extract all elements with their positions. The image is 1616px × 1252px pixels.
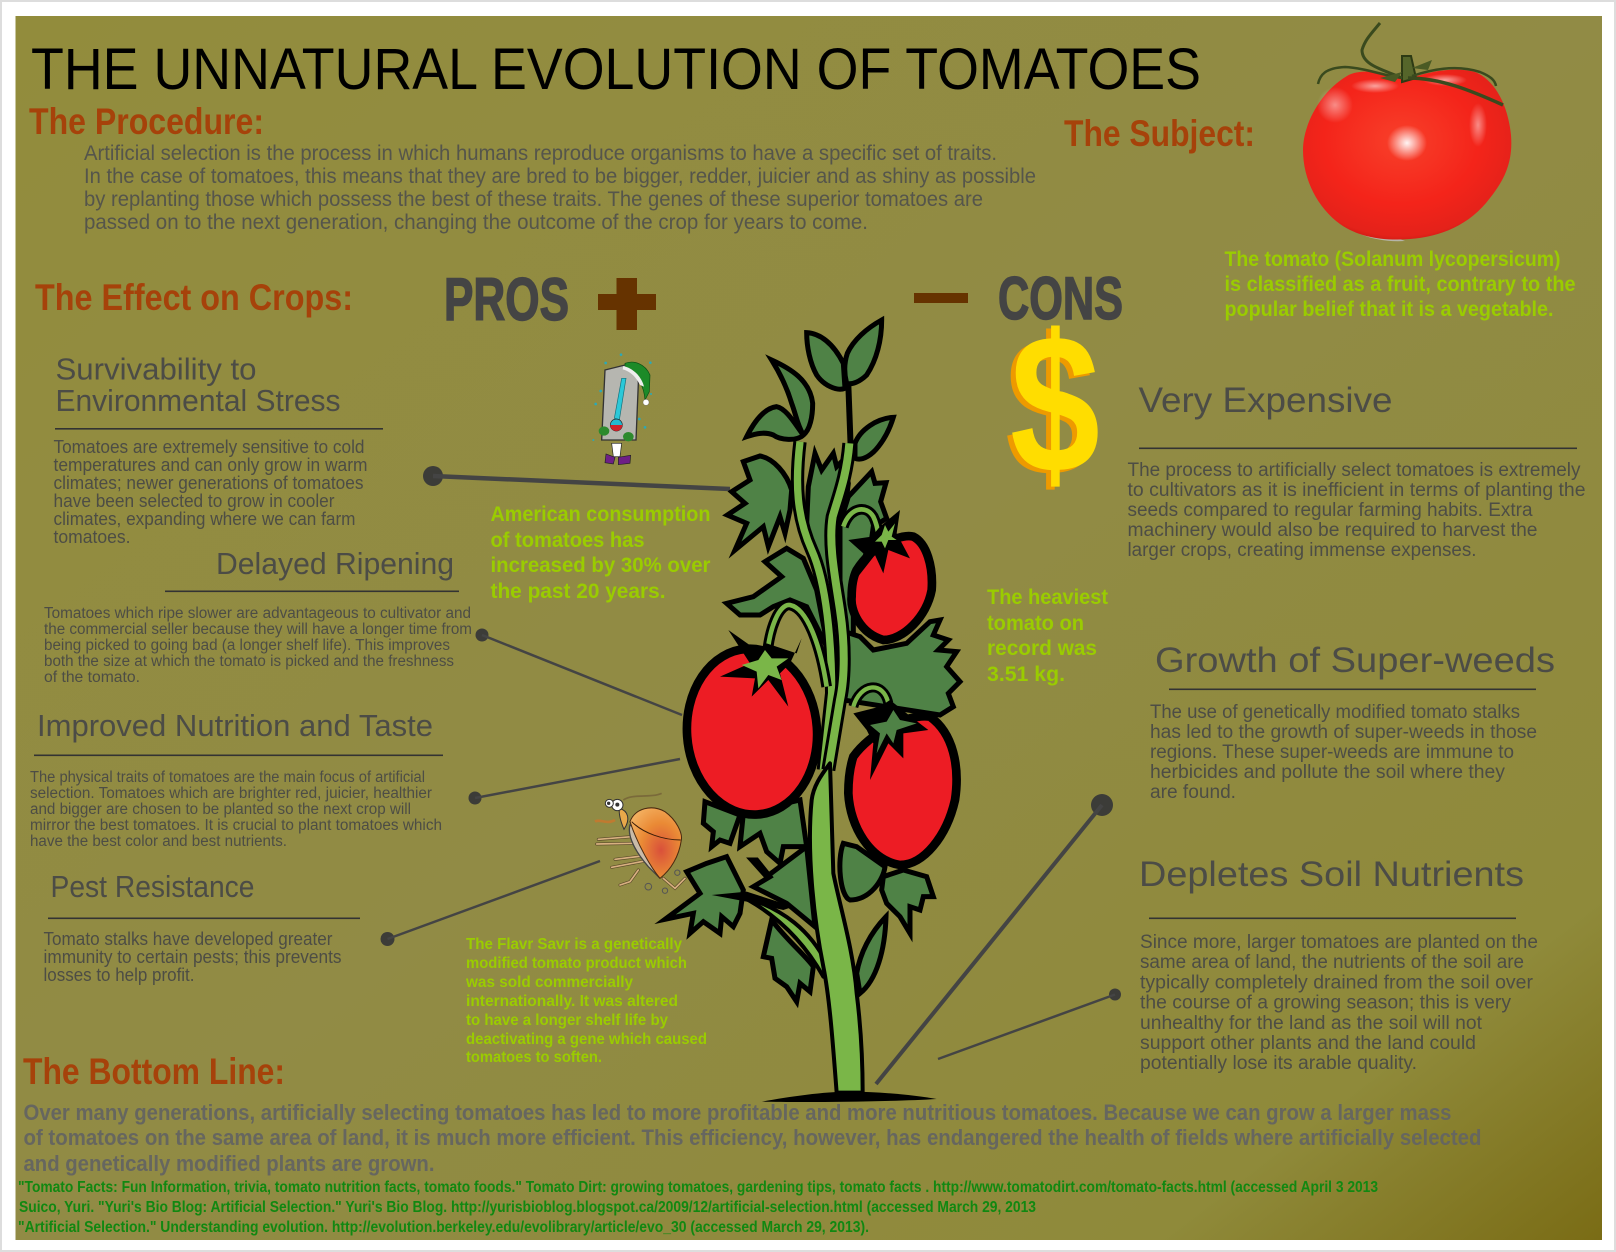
icon: dollar sign: $ <box>1010 295 1100 515</box>
fact: tomato is a fruit: is classified as a fruit, contrary to the <box>1224 273 1576 296</box>
heading: survivability: Survivability to <box>56 352 256 386</box>
references: "Artificial Selection." Understanding evolution. http://evolution.berkeley.edu/evolibrary/article/evo_30 (accessed March 29, 2013). <box>18 1219 869 1236</box>
fact: flavr savr: to have a longer shelf life by <box>466 1012 668 1029</box>
illustration: tomato plant <box>665 320 960 1102</box>
text: soil nutrients body: typically completely drained from the soil over <box>1140 972 1534 994</box>
text: super-weeds body <box>1150 702 1537 803</box>
text: pest resistance body: immunity to certain pests; this prevents <box>44 947 342 967</box>
heading: the effect on crops: The Effect on Crops: <box>35 277 353 318</box>
fact: flavr savr: internationally. It was altered <box>466 993 678 1010</box>
text: survivability body: climates, expanding where we can farm <box>54 509 356 529</box>
fact: flavr savr: was sold commercially <box>465 974 633 991</box>
icon: dollar sign: $ <box>1005 298 1095 518</box>
fact: tomato is a fruit <box>1224 248 1576 321</box>
fact: flavr savr: The Flavr Savr is a genetically <box>466 936 682 953</box>
icon: shivering thermometer <box>592 353 652 465</box>
fact: american consumption: increased by 30% over <box>490 554 710 577</box>
text: soil nutrients body: the course of a growing season; this is very <box>1140 992 1511 1014</box>
leader: delayed ripening <box>476 628 682 715</box>
pro: pest resistance <box>44 869 360 985</box>
text: procedure description <box>84 142 1036 234</box>
text: survivability body: temperatures and can only grow in warm <box>54 455 368 475</box>
heading: pros: PROS <box>444 266 569 333</box>
fact: heaviest tomato: tomato on <box>987 612 1084 635</box>
fact: heaviest tomato: record was <box>987 637 1097 660</box>
references: Suico, Yuri. "Yuri's Bio Blog: Artificial Selection." Yuri's Bio Blog. http://yurisbioblog.blogspot.ca/2009/12/artificial-selection.html (accessed March 29, 2013 <box>19 1199 1036 1216</box>
fact: tomato is a fruit: popular belief that it is a vegetable. <box>1224 298 1554 321</box>
leader: pest resistance <box>380 861 600 946</box>
heading: the bottom line: The Bottom Line: <box>23 1051 285 1092</box>
heading: survivability: Environmental Stress <box>56 383 340 418</box>
heading: delayed ripening: Delayed Ripening <box>216 546 454 581</box>
pro: improved nutrition and taste <box>30 708 443 850</box>
panel: the procedure <box>29 101 1036 234</box>
text: bottom line summary <box>24 1100 1482 1176</box>
text: very expensive body: machinery would also be required to harvest the <box>1128 520 1538 541</box>
text: pest resistance body <box>44 929 342 985</box>
leader: improved nutrition <box>468 759 680 804</box>
text: improved nutrition body: selection. Tomatoes which are brighter red, juicier, healthier <box>30 785 432 802</box>
text: delayed ripening body: being picked to going bad (a longer shelf life). This improves <box>44 637 450 654</box>
text: delayed ripening body: of the tomato. <box>44 669 140 686</box>
text: very expensive body <box>1128 460 1586 561</box>
text: survivability body: Tomatoes are extremely sensitive to cold <box>54 437 364 457</box>
tomato fruits <box>681 510 957 1102</box>
text: super-weeds body: The use of genetically modified tomato stalks <box>1150 702 1520 723</box>
text: very expensive body: The process to artificially select tomatoes is extremely <box>1128 460 1581 481</box>
fact: heaviest tomato: 3.51 kg. <box>987 663 1065 686</box>
icon: tomato photo <box>1303 23 1511 241</box>
plant leaves, upper <box>727 320 960 715</box>
text: procedure description: by replanting those which possess the best of these traits. The genes of these superior tomatoes are <box>84 188 983 211</box>
icon: minus <box>914 293 968 303</box>
leader: soil nutrients <box>938 988 1121 1059</box>
pro: survivability <box>54 352 383 547</box>
text: survivability body: have been selected to grow in cooler <box>54 491 335 511</box>
pro: delayed ripening <box>44 546 472 686</box>
text: very expensive body: seeds compared to regular farming habits. Extra <box>1128 500 1533 521</box>
text: very expensive body: to cultivators as it is inefficient in terms of planting the <box>1128 480 1586 501</box>
text: improved nutrition body: and bigger are chosen to be planted so the next crop will <box>30 801 411 818</box>
text: soil nutrients body: potentially lose its arable quality. <box>1140 1053 1417 1074</box>
text: delayed ripening body: the commercial seller because they will have a longer time from <box>44 621 472 638</box>
text: super-weeds body: are found. <box>1150 782 1236 803</box>
heading: very expensive: Very Expensive <box>1138 381 1392 420</box>
text: improved nutrition body: have the best color and best nutrients. <box>30 833 287 850</box>
fact: american consumption <box>490 503 710 603</box>
heading: survivability <box>56 352 340 418</box>
fact: heaviest tomato: The heaviest <box>987 586 1108 609</box>
text: delayed ripening body <box>44 605 472 686</box>
fact: american consumption: the past 20 years. <box>490 580 666 603</box>
text: survivability body: climates; newer generations of tomatoes <box>54 473 364 493</box>
text: procedure description: In the case of tomatoes, this means that they are bred to be bigger, redder, juicier and as shiny as possible <box>84 165 1036 188</box>
text: soil nutrients body: Since more, larger tomatoes are planted on the <box>1140 932 1538 953</box>
references: "Tomato Facts: Fun Information, trivia, tomato nutrition facts, tomato foods." Tomato Dirt: growing tomatoes, gardening tips, tomato facts . http://www.tomatodirt.com/tomato-facts.html (accessed April 3 2013 <box>18 1179 1378 1196</box>
text: delayed ripening body: Tomatoes which ripe slower are advantageous to cultivator and <box>44 605 471 622</box>
heading: soil nutrients: Depletes Soil Nutrients <box>1139 855 1524 894</box>
fact: american consumption: American consumption <box>490 503 710 526</box>
references <box>18 1179 1378 1236</box>
text: bottom line summary: of tomatoes on the same area of land, it is much more efficient. This efficiency, however, has endangered the health of fields where artificially selected <box>24 1125 1482 1150</box>
fact: american consumption: of tomatoes has <box>490 529 644 552</box>
leader: super-weeds <box>876 794 1113 1084</box>
text: delayed ripening body: both the size at which the tomato is picked and the freshness <box>44 653 454 670</box>
text: bottom line summary: and genetically modified plants are grown. <box>24 1151 434 1176</box>
con: growth of super-weeds <box>1150 641 1555 803</box>
text: super-weeds body: herbicides and pollute the soil where they <box>1150 762 1505 783</box>
text: procedure description: Artificial selection is the process in which humans reproduce organisms to have a specific set of traits. <box>84 142 997 165</box>
text: survivability body: tomatoes. <box>54 527 130 547</box>
text: improved nutrition body: mirror the best tomatoes. It is crucial to plant tomatoes which <box>30 817 442 834</box>
fact: flavr savr <box>465 936 707 1066</box>
heading: pest resistance: Pest Resistance <box>50 869 254 904</box>
heading: the subject: The Subject: <box>1064 113 1255 154</box>
heading: super-weeds: Growth of Super-weeds <box>1155 641 1555 680</box>
text: soil nutrients body: same area of land, the nutrients of the soil are <box>1140 952 1524 973</box>
fact: flavr savr: modified tomato product which <box>466 955 687 972</box>
heading: improved nutrition: Improved Nutrition and Taste <box>37 708 433 743</box>
leader: survivability <box>423 466 730 489</box>
fact: flavr savr: tomatoes to soften. <box>466 1049 602 1066</box>
panel: the subject <box>1064 23 1576 321</box>
panel: the bottom line <box>23 1051 1482 1176</box>
text: survivability body <box>54 437 368 547</box>
icon: plus <box>598 278 656 330</box>
con: very expensive <box>1128 381 1586 561</box>
text: super-weeds body: regions. These super-weeds are immune to <box>1150 742 1514 763</box>
con: depletes soil nutrients <box>1139 855 1538 1074</box>
heading: the procedure: The Procedure: <box>29 101 264 142</box>
text: bottom line summary: Over many generations, artificially selecting tomatoes has led to more profitable and more nutritious tomatoes. Because we can grow a larger mass <box>24 1100 1452 1125</box>
fact: tomato is a fruit: The tomato (Solanum lycopersicum) <box>1224 248 1560 271</box>
plant leaves, lower <box>665 800 933 1002</box>
text: super-weeds body: has led to the growth of super-weeds in those <box>1150 722 1537 743</box>
text: very expensive body: larger crops, creating immense expenses. <box>1128 540 1476 561</box>
text: soil nutrients body <box>1140 932 1538 1074</box>
fact: flavr savr: deactivating a gene which caused <box>466 1031 707 1048</box>
icon: running beetle <box>595 793 685 893</box>
title: THE UNNATURAL EVOLUTION OF TOMATOES <box>31 37 1201 102</box>
heading: cons: CONS <box>998 265 1123 332</box>
text: soil nutrients body: support other plants and the land could <box>1140 1033 1476 1054</box>
text: improved nutrition body <box>30 769 442 850</box>
text: procedure description: passed on to the next generation, changing the outcome of the crop for years to come. <box>84 211 868 234</box>
text: improved nutrition body: The physical traits of tomatoes are the main focus of artificial <box>30 769 425 786</box>
plant stems <box>767 385 888 1093</box>
fact: heaviest tomato <box>987 586 1108 686</box>
text: pest resistance body: losses to help profit. <box>44 965 194 985</box>
text: soil nutrients body: unhealthy for the land as the soil will not <box>1140 1013 1483 1034</box>
text: pest resistance body: Tomato stalks have developed greater <box>44 929 332 949</box>
